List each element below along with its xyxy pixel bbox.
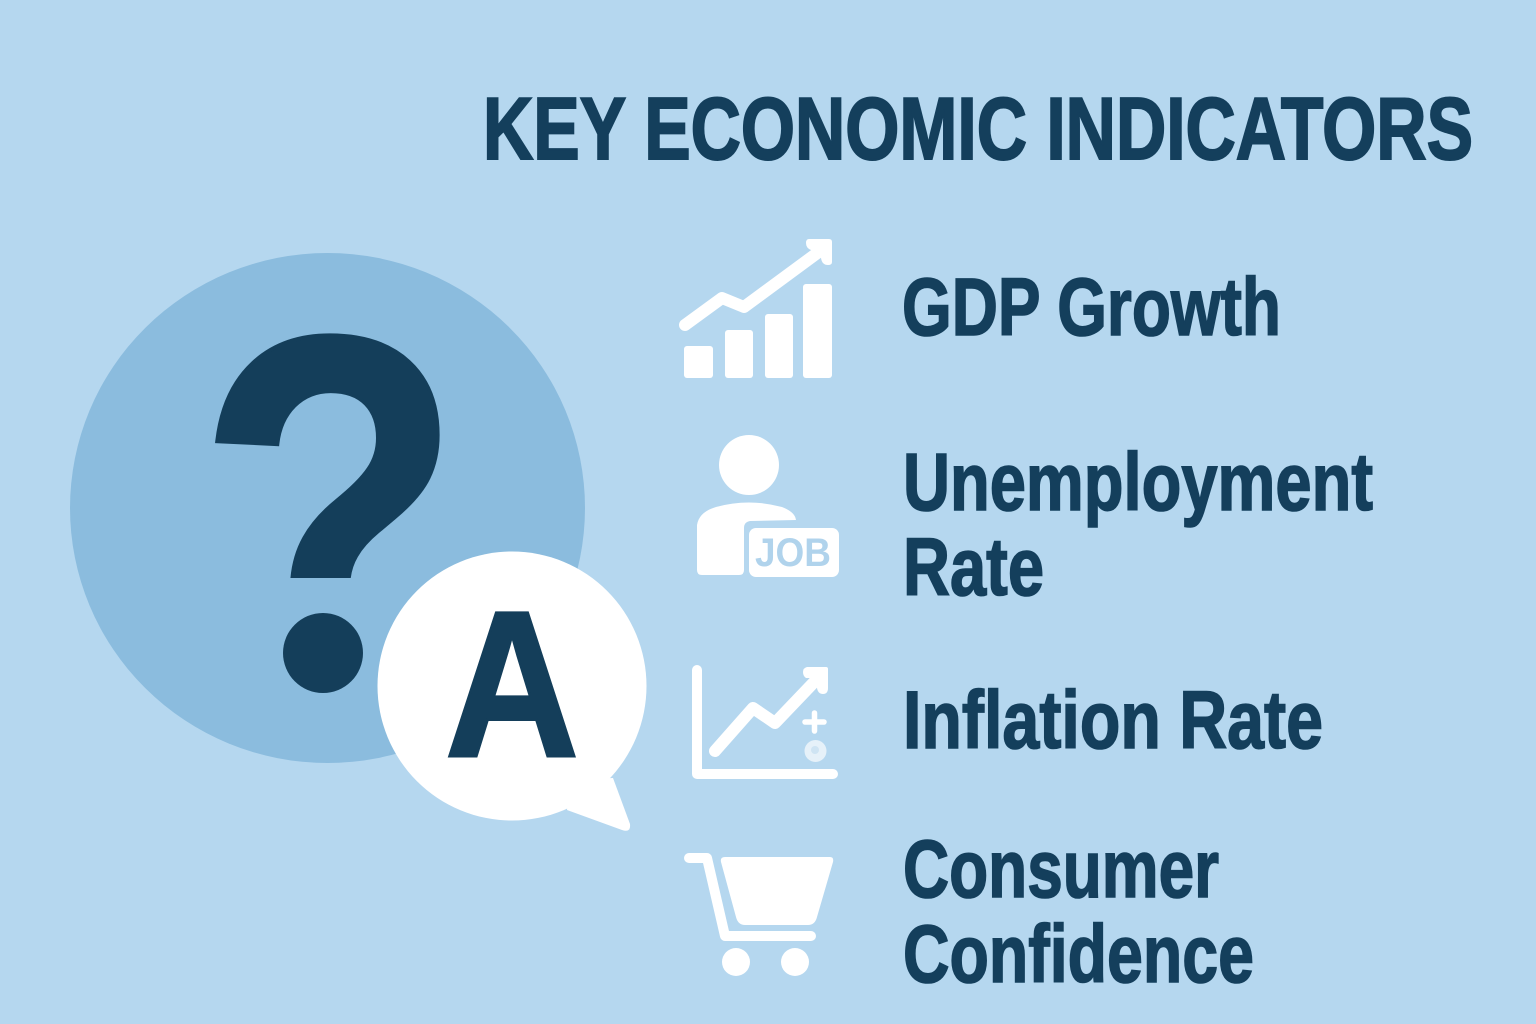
question mark <box>215 333 440 693</box>
icon: shopping cart <box>689 857 833 976</box>
icon: person with job sign: JOB <box>755 531 831 575</box>
icon: GDP growth chart <box>684 239 832 378</box>
Consumer Confidence label: Confidence <box>903 909 1254 1000</box>
Unemployment Rate label: Unemployment <box>903 437 1373 528</box>
Unemployment Rate label <box>903 437 1373 613</box>
Consumer Confidence label: Consumer <box>903 824 1219 915</box>
icon: inflation chart <box>697 667 833 774</box>
icon: person with job sign <box>697 435 839 577</box>
large question circle <box>70 253 585 763</box>
answer speech bubble <box>378 552 646 831</box>
Consumer Confidence label <box>903 824 1254 1000</box>
question bubble illustration <box>70 232 646 831</box>
Inflation Rate label: Inflation Rate <box>903 675 1323 766</box>
Unemployment Rate label: Rate <box>903 522 1044 613</box>
GDP Growth label: GDP Growth <box>902 262 1281 353</box>
answer letter: A <box>445 569 579 801</box>
question mark: ? <box>197 232 463 796</box>
